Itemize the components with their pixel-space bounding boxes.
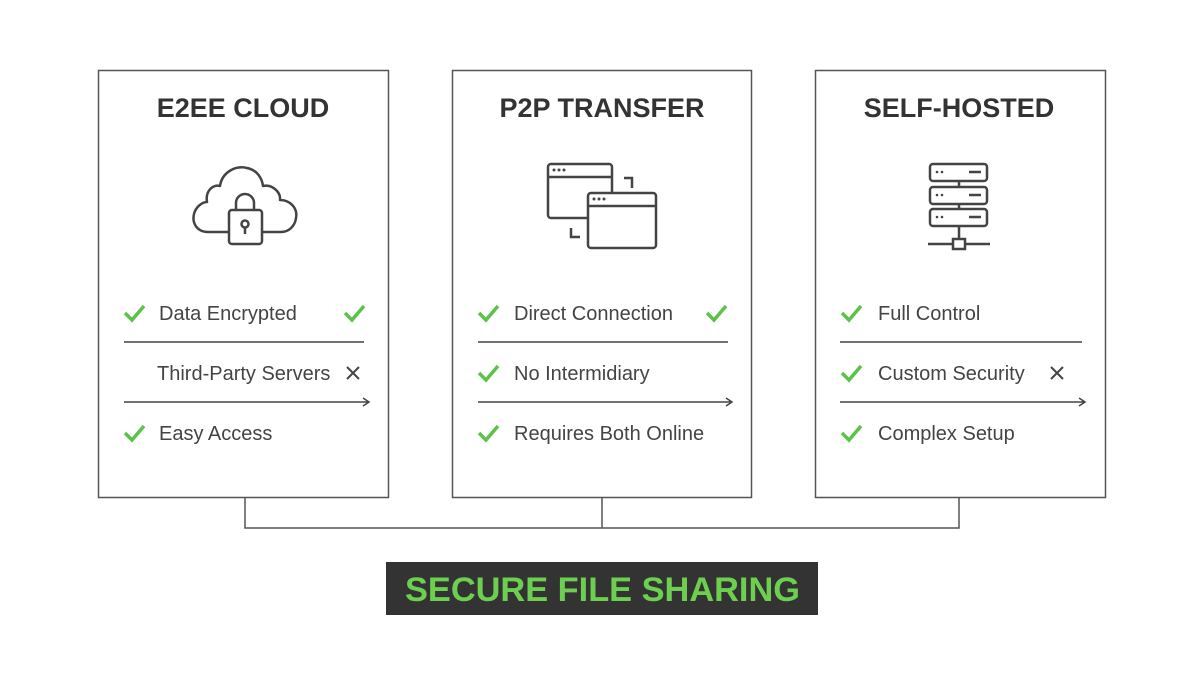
icon: server rack — [928, 164, 990, 249]
title banner: SECURE FILE SHARING — [405, 571, 800, 609]
panel: P2P Transfer — [452, 70, 752, 498]
panel: Self-Hosted — [816, 70, 1106, 498]
list items: Third-Party Servers — [157, 363, 330, 385]
list items: Custom Security — [878, 363, 1025, 385]
list items: Full Control — [878, 303, 980, 325]
list items — [840, 303, 1085, 445]
list items: Requires Both Online — [514, 423, 704, 445]
list items: Direct Connection — [514, 303, 673, 325]
list items — [124, 303, 369, 445]
title banner — [386, 562, 818, 615]
list items: Easy Access — [159, 423, 272, 445]
icon: two windows — [548, 164, 656, 248]
heading: Self-Hosted: SELF-HOSTED — [864, 93, 1054, 123]
list items: Data Encrypted — [159, 303, 297, 325]
connector lines — [245, 497, 959, 528]
list items: Complex Setup — [878, 423, 1015, 445]
heading: E2EE Cloud: E2EE CLOUD — [157, 93, 329, 123]
list items: No Intermidiary — [514, 363, 650, 385]
heading: P2P Transfer: P2P TRANSFER — [499, 93, 705, 123]
list items — [478, 303, 732, 445]
icon: cloud lock — [194, 167, 296, 244]
panel: E2EE Cloud — [98, 70, 388, 498]
